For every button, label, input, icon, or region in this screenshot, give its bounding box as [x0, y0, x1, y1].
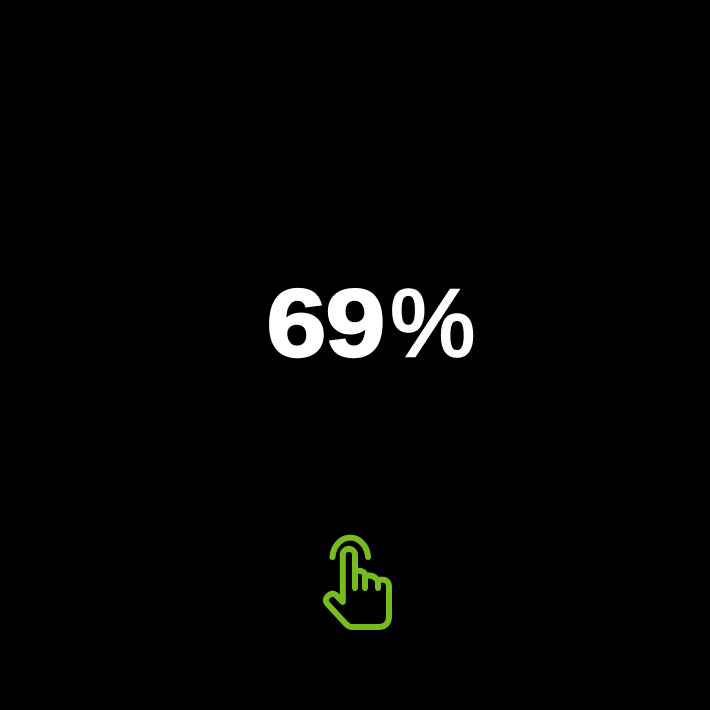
- statistic: 69%: %: [390, 270, 475, 377]
- icon: pointing hand tap: [326, 538, 389, 627]
- statistic: 69%: [266, 269, 475, 377]
- statistic: 69%: 9: [326, 269, 385, 377]
- statistic: 69%: 6: [266, 269, 326, 377]
